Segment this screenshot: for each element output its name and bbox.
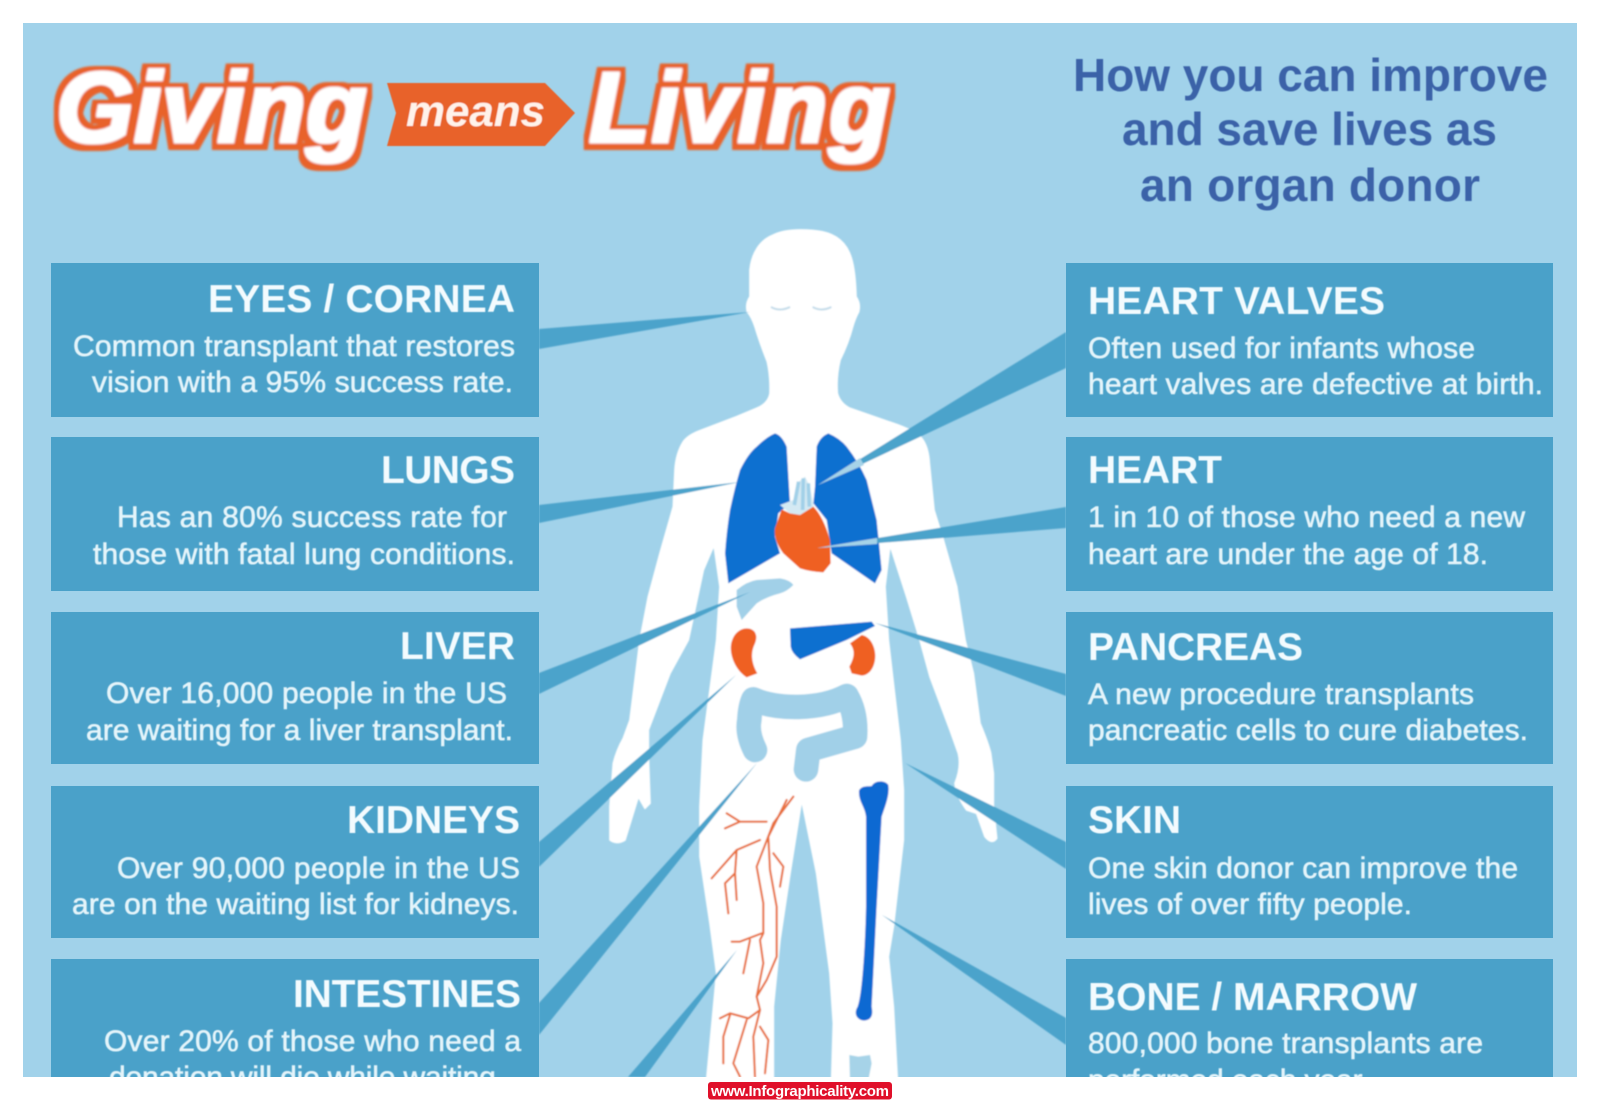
pointer tips over organs bbox=[817, 458, 877, 548]
panel: intestines: Over 20% of those who need a bbox=[104, 1025, 521, 1058]
subtitle: How you can improve bbox=[1073, 49, 1548, 101]
panel: skin: One skin donor can improve the bbox=[1088, 852, 1518, 885]
heart valves bbox=[780, 477, 814, 517]
body silhouette bbox=[610, 230, 997, 1080]
panel: heart: heart are under the age of 18. bbox=[1088, 538, 1488, 571]
panel: eyes / cornea: EYES / CORNEA bbox=[208, 278, 515, 321]
pointer: heart valves bbox=[818, 332, 1066, 485]
panel: lungs bbox=[51, 437, 539, 591]
panel: eyes / cornea: vision with a 95% success rate. bbox=[92, 366, 513, 399]
panel: pancreas: PANCREAS bbox=[1088, 626, 1303, 669]
panel: skin bbox=[1066, 786, 1553, 938]
panel: bone / marrow bbox=[1066, 959, 1553, 1097]
intestines bbox=[749, 696, 855, 769]
panel: pancreas: pancreatic cells to cure diabetes. bbox=[1088, 714, 1528, 747]
pointer: lungs bbox=[539, 482, 740, 523]
panel: intestines: donation will die while waiting. bbox=[109, 1061, 504, 1094]
title word: Living: Living bbox=[589, 52, 890, 164]
panel: heart bbox=[1066, 437, 1553, 591]
right lung bbox=[813, 433, 882, 583]
panel: kidneys: Over 90,000 people in the US bbox=[117, 852, 520, 885]
panel: kidneys: are on the waiting list for kidneys. bbox=[72, 888, 519, 921]
panel: eyes / cornea bbox=[51, 263, 539, 417]
subtitle: an organ donor bbox=[1140, 159, 1480, 211]
panel: kidneys bbox=[51, 786, 539, 938]
panel: liver: LIVER bbox=[400, 625, 515, 668]
pointer: pancreas bbox=[875, 623, 1066, 696]
panel: intestines bbox=[51, 959, 539, 1077]
panel: heart valves: heart valves are defective at birth. bbox=[1088, 368, 1543, 401]
panel: intestines: INTESTINES bbox=[293, 973, 521, 1016]
panel: bone / marrow: 800,000 bone transplants are bbox=[1088, 1027, 1483, 1060]
knee joint bbox=[849, 1055, 872, 1080]
pointer: heart bbox=[817, 507, 1066, 548]
watermark badge: www.Infographicality.com bbox=[710, 1083, 889, 1100]
panel: bone / marrow: BONE / MARROW bbox=[1088, 976, 1417, 1019]
panel: kidneys: KIDNEYS bbox=[347, 799, 520, 842]
human body figure with organs bbox=[610, 230, 997, 1080]
panel: liver: are waiting for a liver transplant. bbox=[86, 714, 513, 747]
panel: liver bbox=[51, 612, 539, 764]
pointer: kidneys bbox=[539, 675, 736, 867]
pancreas bbox=[790, 622, 875, 659]
panel: heart valves bbox=[1066, 263, 1553, 417]
pointer: eyes bbox=[539, 312, 750, 349]
means arrow bbox=[387, 83, 575, 146]
pointer: liver bbox=[539, 592, 750, 694]
panel: bone / marrow: performed each year. bbox=[1088, 1064, 1369, 1097]
pointer: intestines bbox=[539, 763, 757, 1035]
panel: lungs: those with fatal lung conditions. bbox=[93, 538, 515, 571]
veins / skin graft bbox=[712, 797, 793, 1077]
left lung bbox=[725, 433, 790, 583]
title bbox=[56, 52, 890, 164]
subtitle: and save lives as bbox=[1122, 103, 1497, 155]
panel: heart valves: Often used for infants whose bbox=[1088, 332, 1475, 365]
panel: liver: Over 16,000 people in the US bbox=[106, 677, 507, 710]
panel: lungs: LUNGS bbox=[381, 449, 515, 492]
panel: pancreas: A new procedure transplants bbox=[1088, 678, 1474, 711]
panel: eyes / cornea: Common transplant that restores bbox=[73, 330, 515, 363]
right kidney bbox=[849, 635, 875, 676]
femur bone bbox=[856, 781, 889, 1021]
panel: lungs: Has an 80% success rate for bbox=[117, 501, 507, 534]
heart bbox=[775, 507, 831, 572]
subtitle bbox=[1073, 49, 1548, 211]
panel: skin: lives of over fifty people. bbox=[1088, 888, 1412, 921]
panel: pancreas bbox=[1066, 612, 1553, 764]
means arrow: means bbox=[406, 87, 545, 136]
liver bbox=[737, 578, 793, 620]
pointer: skin bbox=[905, 763, 1066, 869]
panel: heart: HEART bbox=[1088, 449, 1222, 492]
left kidney bbox=[731, 628, 757, 677]
pointer: bone marrow bbox=[882, 915, 1066, 1045]
eyes bbox=[772, 307, 831, 309]
panel: heart: 1 in 10 of those who need a new bbox=[1088, 501, 1525, 534]
pointer: skin graft lower left bbox=[628, 950, 737, 1077]
title word: Giving: Giving bbox=[56, 52, 367, 164]
panel: heart valves: HEART VALVES bbox=[1088, 280, 1385, 323]
panel: skin: SKIN bbox=[1088, 799, 1181, 842]
